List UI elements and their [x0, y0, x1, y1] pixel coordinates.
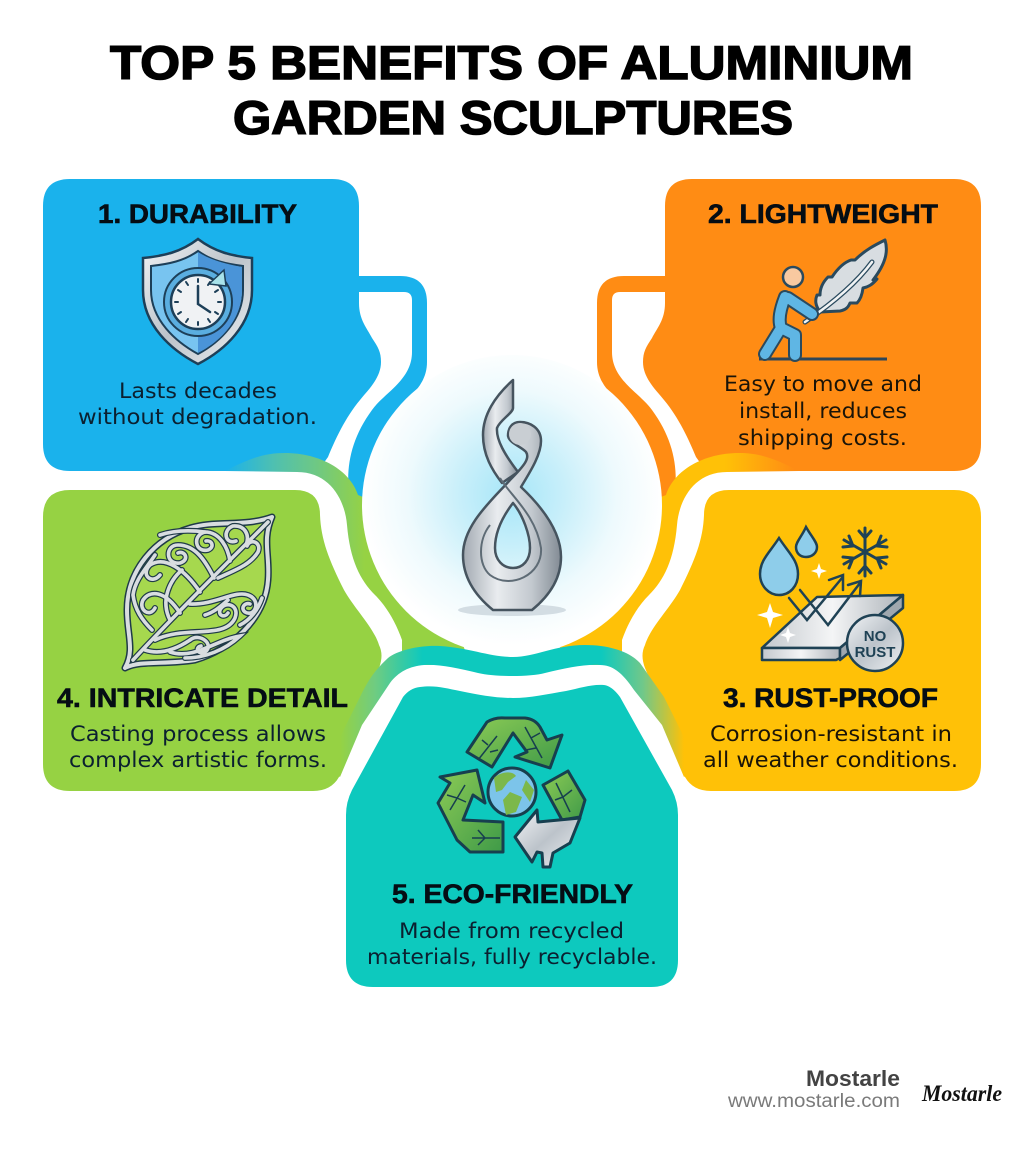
footer brand	[727, 1066, 1002, 1112]
description: Made from recycled	[399, 919, 624, 944]
heading: 3. RUST-PROOF	[723, 683, 938, 713]
title	[110, 36, 913, 144]
panel: intricate detail background	[43, 490, 382, 791]
signature logo: Mostarle	[921, 1081, 1002, 1106]
panel: eco-friendly: materials, fully recyclable.	[367, 945, 657, 970]
connector strip: green	[225, 453, 470, 665]
description: Easy to move and	[724, 372, 922, 397]
sculpture body	[463, 422, 561, 610]
connector strip: orange	[597, 276, 676, 520]
no rust badge	[847, 615, 903, 671]
connector strip: teal	[334, 645, 690, 777]
panel: lightweight: shipping costs.	[738, 426, 907, 451]
panel: durability background	[43, 179, 381, 471]
panel: lightweight	[708, 199, 939, 451]
panel: lightweight background	[643, 179, 981, 471]
panel: durability: without degradation.	[78, 405, 317, 430]
title: GARDEN SCULPTURES	[233, 91, 793, 144]
footer brand: www.mostarle.com	[727, 1091, 900, 1112]
panel: eco-friendly background	[346, 685, 678, 987]
sculpture base shadow	[458, 604, 566, 616]
panel: rust-proof background	[642, 490, 981, 791]
icon: shield with clock	[143, 239, 252, 364]
central glow circle	[362, 355, 662, 655]
panel: intricate detail	[57, 517, 348, 773]
sculpture inner fold	[481, 478, 541, 581]
connector strip: blue	[348, 276, 427, 520]
heading: 1. DURABILITY	[98, 199, 297, 229]
panel: lightweight: install, reduces	[739, 399, 907, 424]
heading: 5. ECO-FRIENDLY	[392, 879, 633, 909]
panel: durability	[78, 199, 317, 430]
description: Lasts decades	[119, 379, 277, 404]
sculpture ball	[509, 423, 531, 445]
title: TOP 5 BENEFITS OF ALUMINIUM	[110, 36, 913, 89]
description: Corrosion-resistant in	[710, 722, 952, 747]
description: Casting process allows	[70, 722, 326, 747]
heading: 4. INTRICATE DETAIL	[57, 683, 348, 713]
sculpture	[458, 380, 566, 616]
panel: eco-friendly	[367, 718, 657, 970]
icon: filigree leaf	[125, 517, 272, 668]
footer brand: Mostarle	[806, 1066, 900, 1091]
icon: weather and no rust plate	[757, 527, 903, 671]
icon: person carrying feather	[759, 240, 887, 359]
no rust badge: NO	[864, 628, 887, 645]
sculpture back ribbon	[483, 380, 518, 483]
panel: rust-proof: all weather conditions.	[703, 748, 958, 773]
connector strip: yellow	[554, 453, 799, 665]
no rust badge: RUST	[855, 644, 895, 661]
heading: 2. LIGHTWEIGHT	[708, 199, 939, 229]
panel: intricate detail: complex artistic forms.	[69, 748, 327, 773]
icon: recycling arrows with globe	[438, 718, 585, 867]
panel: rust-proof	[703, 527, 958, 773]
